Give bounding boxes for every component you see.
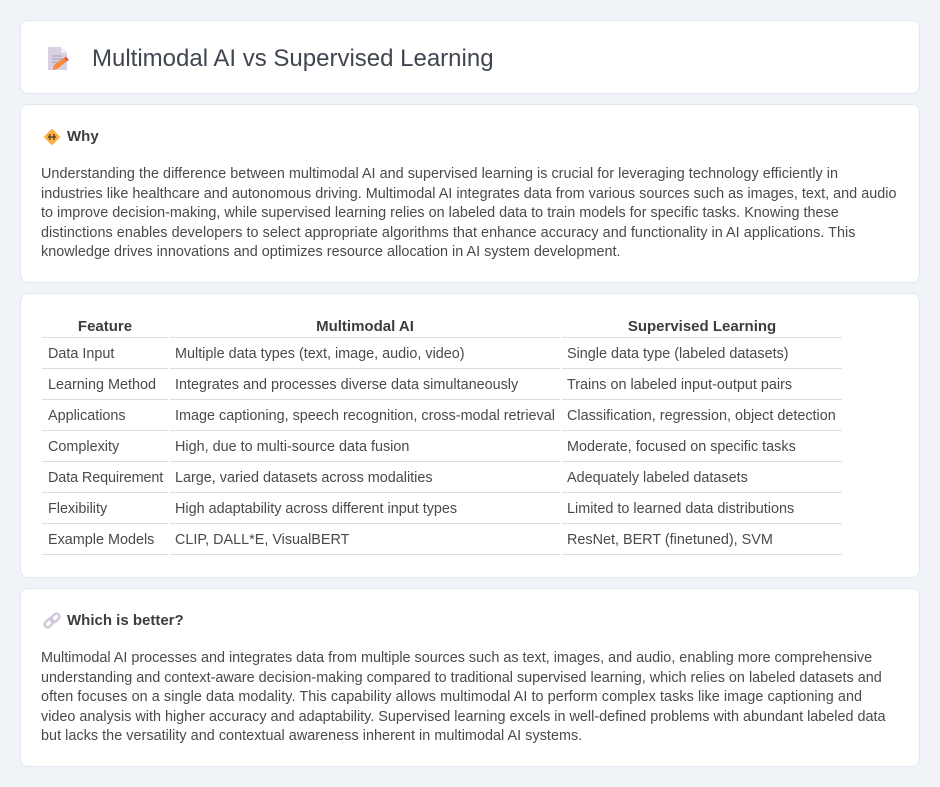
text block: which is better (41, 650, 886, 744)
table row: flexibility (42, 501, 842, 524)
text block: why: industries like healthcare and autonomous driving. Multimodal AI integrates data from various sources such as images, text, and audio (41, 186, 896, 202)
table row: data input: Single data type (labeled datasets) (567, 346, 789, 362)
table row: example models: CLIP, DALL*E, VisualBERT (175, 532, 349, 548)
table row: applications: Image captioning, speech recognition, cross-modal retrieval (175, 408, 555, 424)
table row: complexity: Complexity (48, 439, 119, 455)
table row: complexity: Moderate, focused on specific tasks (567, 439, 796, 455)
panel: title (20, 20, 920, 94)
table row: data requirement: Large, varied datasets across modalities (175, 470, 433, 486)
table row: data requirement (42, 470, 842, 493)
text block: why: distinctions enables developers to select appropriate algorithms that enhance accuracy and functionality in AI applications. This (41, 224, 856, 240)
table row: flexibility: Limited to learned data distributions (567, 501, 794, 517)
table row: data input (42, 346, 842, 369)
table row: data input: Data Input (48, 346, 114, 362)
text block: which is better: understanding and context-aware decision-making compared to traditional supervised learning, which relies on labeled datasets and (41, 670, 882, 686)
text block: which is better: but lacks the versatility and contextual awareness inherent in multimodal AI systems. (41, 728, 582, 744)
table row: example models (42, 532, 842, 555)
icon: link (43, 612, 61, 629)
table row: flexibility: Flexibility (48, 501, 107, 517)
text block: why (41, 166, 896, 260)
table row: learning method (42, 377, 842, 400)
text block: which is better: video analysis with higher accuracy and adaptability. Supervised learning excels in well-defined problems with abundant labeled data (41, 708, 886, 724)
table row: applications: Classification, regression, object detection (567, 408, 836, 424)
table header: Multimodal AI (316, 318, 414, 335)
table header: Supervised Learning (628, 318, 776, 335)
title: Multimodal AI vs Supervised Learning (92, 45, 494, 72)
table header: Feature (78, 318, 132, 335)
panel: which is better (20, 588, 920, 767)
table row: data requirement: Data Requirement (48, 470, 163, 486)
icon: document with pencil (48, 47, 69, 70)
panel: comparison table (20, 293, 920, 578)
text block: which is better: Multimodal AI processes and integrates data from multiple sources such as text, images, and audio, enabling more comprehensive (41, 650, 872, 666)
table row: applications: Applications (48, 408, 126, 424)
text block: why: knowledge drives innovations and optimizes resource allocation in AI system development. (41, 244, 621, 260)
table row: applications (42, 408, 842, 431)
table row: learning method: Trains on labeled input-output pairs (567, 377, 792, 393)
table row: flexibility: High adaptability across different input types (175, 501, 457, 517)
heading: why: Why (67, 128, 99, 145)
table row: data requirement: Adequately labeled datasets (567, 470, 748, 486)
table row: learning method: Learning Method (48, 377, 156, 393)
table row: example models: ResNet, BERT (finetuned), SVM (567, 532, 773, 548)
icon: warning diamond (44, 129, 60, 145)
table row: complexity: High, due to multi-source data fusion (175, 439, 409, 455)
table row: learning method: Integrates and processes diverse data simultaneously (175, 377, 518, 393)
panel: why (20, 104, 920, 283)
text block: why: to improve decision-making, while supervised learning relies on labeled data to train models for specific tasks. Knowing these (41, 205, 839, 221)
text block: why: Understanding the difference between multimodal AI and supervised learning is crucial for leveraging technology efficiently in (41, 166, 838, 182)
heading: which is better: Which is better? (67, 612, 184, 629)
text block: which is better: often focuses on a single data modality. This capability allows multimodal AI to perform complex tasks like image captioning and (41, 689, 862, 705)
table row: data input: Multiple data types (text, image, audio, video) (175, 346, 465, 362)
table row: complexity (42, 439, 842, 462)
table row: example models: Example Models (48, 532, 154, 548)
table header (42, 318, 842, 338)
